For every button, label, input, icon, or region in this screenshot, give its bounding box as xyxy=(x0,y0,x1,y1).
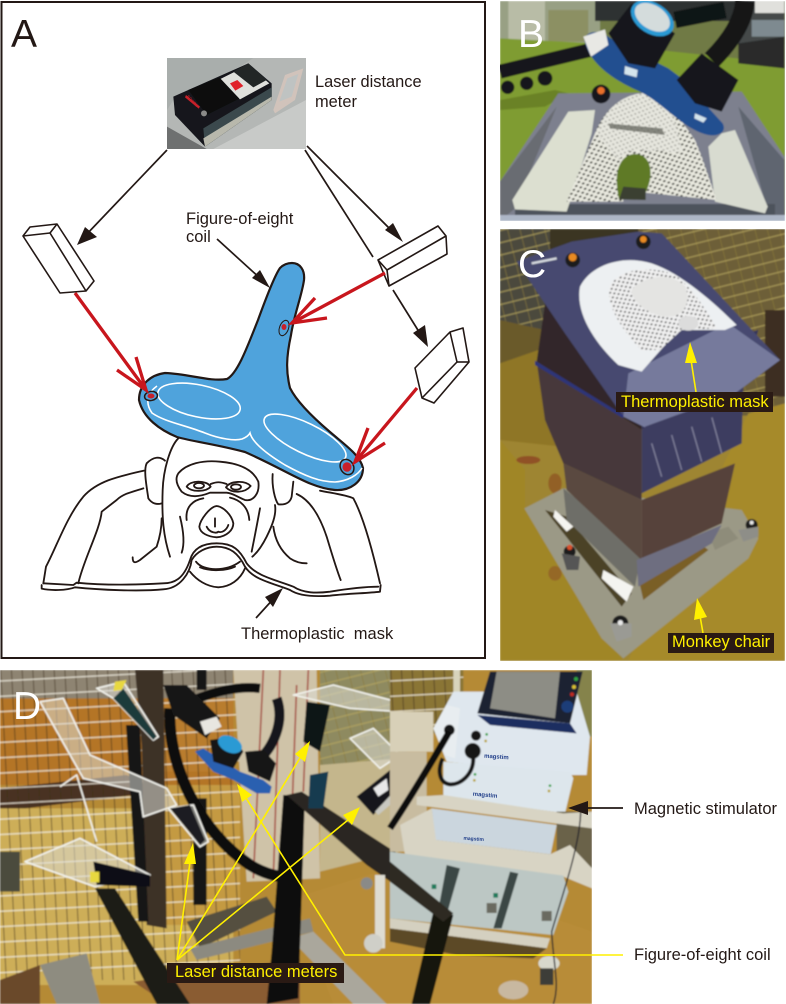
arrow: coil label xyxy=(217,239,270,288)
label: figure-of-eight coil: Figure-of-eight xyxy=(186,210,294,228)
arrow: meter to lower right box xyxy=(305,150,428,347)
label: laser distance meter: Laser distance xyxy=(315,73,422,91)
panel D: photo of full apparatus xyxy=(0,670,623,1004)
arrow: monkey chair xyxy=(694,598,707,633)
label: figure-of-eight coil: Figure-of-eight coil xyxy=(634,946,771,964)
stimulator brand text: magstim xyxy=(472,792,498,800)
arrow: mask label xyxy=(256,588,283,618)
coil inner loops xyxy=(148,377,362,482)
panel C letter: C xyxy=(518,243,546,286)
drawing: monkey head and thermoplastic mask xyxy=(42,438,381,596)
arrow: magnetic stimulator xyxy=(568,801,623,815)
arrows: laser distance meters xyxy=(177,741,360,960)
stimulator brand text xyxy=(463,754,509,843)
panel B letter: B xyxy=(518,13,544,56)
label: monkey chair: Monkey chair xyxy=(672,633,771,651)
label: laser distance meters: Laser distance meters xyxy=(175,963,337,981)
arrow: figure-of-eight coil leader xyxy=(237,784,623,955)
stimulator brand text: magstim xyxy=(463,836,485,843)
arrow: meter to upper right box xyxy=(307,146,403,242)
label: thermoplastic mask: Thermoplastic mask xyxy=(241,625,394,643)
red laser arrows xyxy=(75,273,417,462)
panel A letter: A xyxy=(11,13,37,56)
box: lower right meter xyxy=(415,328,469,403)
label: thermoplastic mask: Thermoplastic mask xyxy=(621,393,769,411)
panel D letter: D xyxy=(13,685,41,728)
meter brand: BOSCH xyxy=(186,94,199,108)
stimulator brand text: magstim xyxy=(484,754,509,761)
arrow: thermoplastic mask xyxy=(685,342,697,392)
laser target dots xyxy=(144,319,357,477)
photo: laser distance meter xyxy=(167,58,306,149)
panel A: schematic xyxy=(2,2,485,658)
label: magnetic stimulator: Magnetic stimulator xyxy=(634,800,778,818)
box: left meter xyxy=(23,224,94,293)
coil body xyxy=(139,263,363,490)
panel C: photo of monkey chair xyxy=(500,229,785,661)
label: laser distance meter: meter xyxy=(315,93,357,111)
panel B: photo of coil over mask xyxy=(500,0,785,221)
box: upper right meter xyxy=(378,226,447,286)
label: figure-of-eight coil: coil xyxy=(186,228,211,246)
arrow: meter to left box xyxy=(77,150,167,245)
